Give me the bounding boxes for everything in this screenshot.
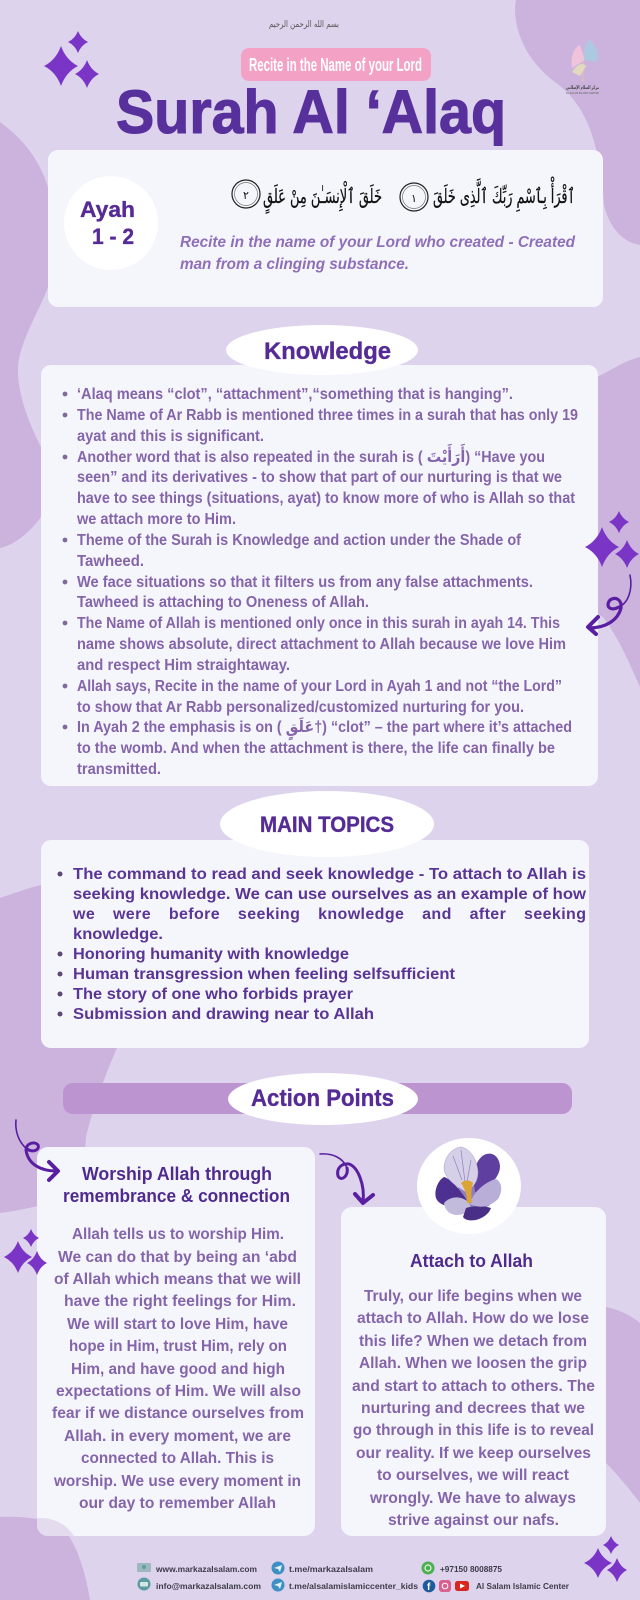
attach body: and start to attach to others. The [352,1378,595,1395]
arrow: curl into worship panel [16,1120,58,1180]
icon: sparkles top left [44,31,99,88]
topic text: Submission and drawing near to Allah [73,1006,374,1023]
worship body: We can do that by being an ‘abd [58,1249,297,1266]
attach body: Truly, our life begins when we [364,1288,582,1305]
knowledge text: transmitted. [77,761,161,778]
icon: youtube [455,1581,469,1591]
attach body: this life? When we detach from [359,1333,587,1350]
icon: sparkles bottom right [584,1536,627,1582]
topic text: we were before seeking knowledge and after seeking [72,906,586,923]
email text: info@markazalsalam.com [156,1581,261,1591]
worship body [52,1226,304,1512]
title: Surah Al ‘Alaq [116,78,506,146]
knowledge text: ayat and this is significant. [77,428,264,445]
telegram text 2: t.me/alsalamislamiccenter_kids [289,1581,418,1591]
bismillah calligraphy: بسم الله الرحمن الرحيم [269,20,339,30]
knowledge text: name shows absolute, direct attachment to Allah because we love Him [77,636,566,653]
knowledge text: to show that Ar Rabb personalized/customized nurturing for you. [77,699,524,716]
translation [180,234,576,273]
attach body: Allah. When we loosen the grip [359,1355,587,1372]
arabic verse 1: ١ [411,192,417,205]
worship body: We will start to love Him, have [67,1316,288,1333]
attach body: to ourselves, we will react [377,1467,570,1484]
attach body: nurturing and decrees that we [361,1400,585,1417]
topic text: seeking knowledge. We can use ourselves as an example of how [73,886,587,903]
icon: facebook [423,1580,435,1593]
heading: knowledge: Knowledge [264,338,391,365]
icon: facebook: f [427,1582,431,1593]
topic text: The command to read and seek knowledge - To attach to Allah is [73,866,586,883]
worship body: connected to Allah. This is [81,1450,274,1467]
knowledge text: The Name of Allah is mentioned only once in this surah in ayah 14. This [77,615,560,632]
knowledge text: to the womb. And when the attachment is there, the life can finally be [77,740,555,757]
attach body: attach to Allah. How do we lose [357,1310,589,1327]
attach body: our reality. If we keep ourselves [356,1445,591,1462]
worship tint [37,1518,74,1536]
topic bullets [58,872,62,1016]
knowledge text: ‘Alaq means “clot”, “attachment”,“something that is hanging”. [77,386,513,403]
panel: ayah 1-2 [48,150,603,307]
icon: whatsapp [422,1562,434,1574]
icon: sparkles right [585,511,639,568]
arabic verse 1 [400,177,575,212]
badge: subtitle: Recite in the Name of your Lord [249,55,422,75]
worship heading: remembrance & connection [63,1186,290,1206]
knowledge text: Another word that is also repeated in the surah is ( أَرَأَيْتَ) “Have you [77,443,545,466]
knowledge text: In Ayah 2 the emphasis is on ( عَلَقٍ†) “clot” – the part where it’s attached [77,717,572,741]
worship body: worship. We use every moment in [53,1473,301,1490]
knowledge text: and respect Him straightaway. [77,657,290,674]
knowledge text: have to see things (situations, ayat) to know more of who is Allah so that [77,490,575,507]
footer: contact details [137,1562,570,1593]
topic text [72,866,587,1023]
worship body: Him, and have good and high [71,1361,285,1378]
logo [566,40,600,95]
knowledge text [76,386,578,778]
worship body: expectations of Him. We will also [56,1383,301,1400]
ayah circle label [64,176,158,270]
panel: worship allah [37,1147,315,1536]
translation: man from a clinging substance. [180,256,409,273]
icon: website [137,1563,151,1572]
knowledge text: Theme of the Surah is Knowledge and action under the Shade of [77,532,522,549]
badge: subtitle [241,48,431,81]
heading: knowledge [226,325,418,375]
attach body: wrongly. We have to always [369,1490,576,1507]
panel: attach to allah [341,1207,606,1536]
icon: instagram [439,1580,451,1592]
attach body [352,1288,595,1529]
ayah circle label: Ayah [80,197,135,222]
panel: knowledge [41,365,598,786]
icon: telegram 2 [272,1578,284,1592]
icon: telegram 1 [272,1562,284,1574]
topic text: Human transgression when feeling selfsufficient [73,966,456,983]
attach heading: Attach to Allah [410,1251,533,1271]
topic text: Honoring humanity with knowledge [73,946,349,963]
worship body: our day to remember Allah [79,1495,276,1512]
panel: main topics [41,840,589,1048]
action points bar [63,1083,572,1114]
arrow: curl to attach panel [320,1154,373,1203]
knowledge text: Allah says, Recite in the name of your Lord in Ayah 1 and not “the Lord” [77,678,562,695]
worship body: have the right feelings for Him. [64,1293,296,1310]
knowledge text: we attach more to Him. [76,511,236,528]
worship heading [63,1164,290,1206]
worship body: fear if we distance ourselves from [52,1405,304,1422]
worship heading: Worship Allah through [82,1164,272,1184]
knowledge text: Tawheed is attaching to Oneness of Allah. [77,594,369,611]
knowledge bullets [63,392,67,729]
icon: crocus flower [417,1138,521,1234]
heading: action points [228,1073,418,1125]
center name text: Al Salam Islamic Center [476,1581,570,1591]
website text: www.markazalsalam.com [155,1564,257,1574]
attach body: go through in this life is to reveal [353,1422,594,1439]
topic text: The story of one who forbids prayer [73,986,353,1003]
attach body: strive against our nafs. [388,1512,559,1529]
knowledge text: The Name of Ar Rabb is mentioned three times in a surah that has only 19 [77,407,578,424]
arrow: curl to knowledge [588,575,631,634]
icon: sparkles left [4,1229,47,1275]
arabic verse 2: خَلَقَ ٱلْإِنسَـٰنَ مِنْ عَلَقٍ [263,182,382,214]
ayah circle label: 1 - 2 [92,224,134,249]
worship body: Allah. in every moment, we are [64,1428,291,1445]
logo: AL SALAM ISLAMIC CENTER [566,91,600,95]
worship body: Allah tells us to worship Him. [72,1226,284,1243]
heading: main topics [220,791,434,857]
phone text: +97150 8008875 [440,1564,502,1574]
translation: Recite in the name of your Lord who created - Created [180,234,576,251]
worship body: hope in Him, trust Him, rely on [69,1338,287,1355]
knowledge text: We face situations so that it filters us from any false attachments. [77,574,533,591]
arabic verse 2 [232,180,382,214]
worship body: of Allah which means that we will [54,1271,301,1288]
topic text: knowledge. [73,926,163,943]
knowledge text: Tawheed. [77,553,144,570]
arabic verse 2: ٢ [243,189,249,202]
heading: main topics: MAIN TOPICS [260,812,394,837]
logo: مركز السلام الإسلامي [566,85,599,91]
icon: email [138,1578,150,1590]
telegram text 1: t.me/markazalsalam [289,1564,373,1574]
heading: action points: Action Points [251,1085,394,1112]
knowledge text: seen” and its derivatives - to show that part of our nurturing is that we [77,469,562,486]
